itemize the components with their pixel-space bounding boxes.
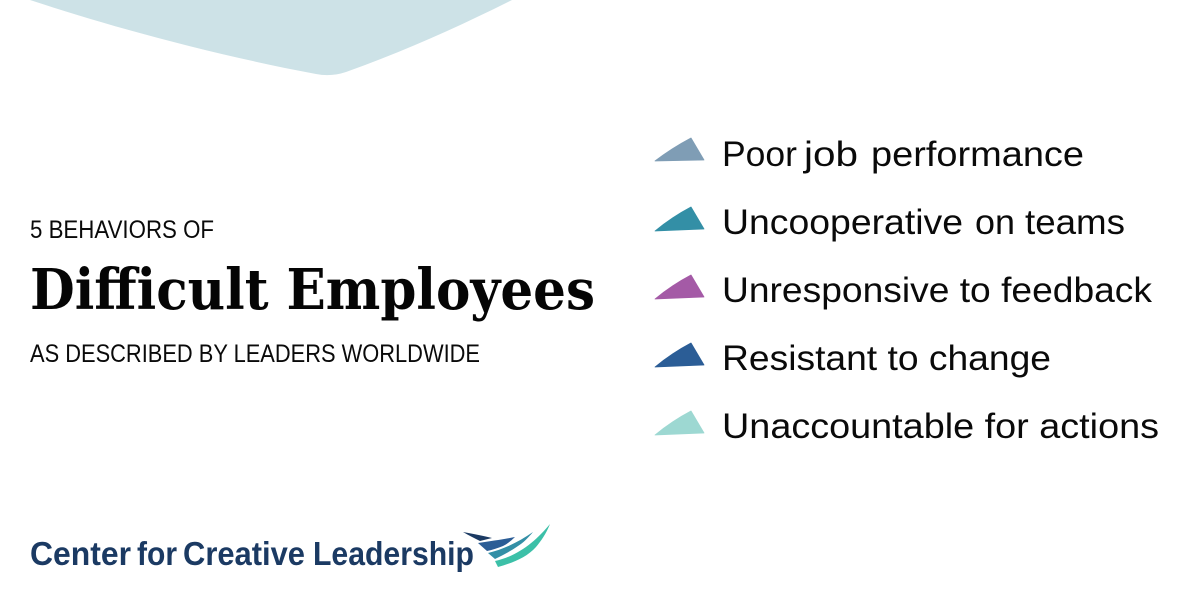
item: unresponsive to feedback: Unresponsive to feedback: [722, 271, 1153, 310]
logo wordmark: Center: [30, 535, 131, 572]
logo: center for creative leadership: [30, 524, 550, 572]
title block: [30, 216, 595, 368]
logo wordmark: for: [137, 535, 177, 572]
item: poor job performance: [655, 135, 1084, 174]
item: uncooperative on teams: [655, 203, 1125, 242]
logo mark: swoosh: [463, 524, 550, 567]
item: uncooperative on teams: Uncooperative: [722, 203, 963, 242]
item: poor job performance: performance: [871, 135, 1084, 174]
logo wordmark: Creative: [183, 535, 305, 572]
eyebrow: 5 behaviors of: 5 BEHAVIORS OF: [30, 216, 214, 244]
logo wordmark: [30, 535, 474, 572]
logo wordmark: Leadership: [313, 535, 474, 572]
item: unaccountable for actions: Unaccountable for actions: [722, 407, 1159, 446]
item: resistant to change: Resistant to change: [722, 339, 1051, 378]
item: uncooperative on teams: teams: [1025, 203, 1125, 242]
item: poor job performance: job: [803, 135, 858, 174]
decorative top shape: [30, 0, 512, 75]
main heading: Difficult Employees: [30, 257, 595, 323]
behaviors list: [655, 135, 1159, 446]
subheading: AS DESCRIBED BY LEADERS WORLDWIDE: [30, 340, 480, 368]
item: poor job performance: Poor: [722, 135, 797, 174]
item: uncooperative on teams: on: [975, 203, 1015, 242]
